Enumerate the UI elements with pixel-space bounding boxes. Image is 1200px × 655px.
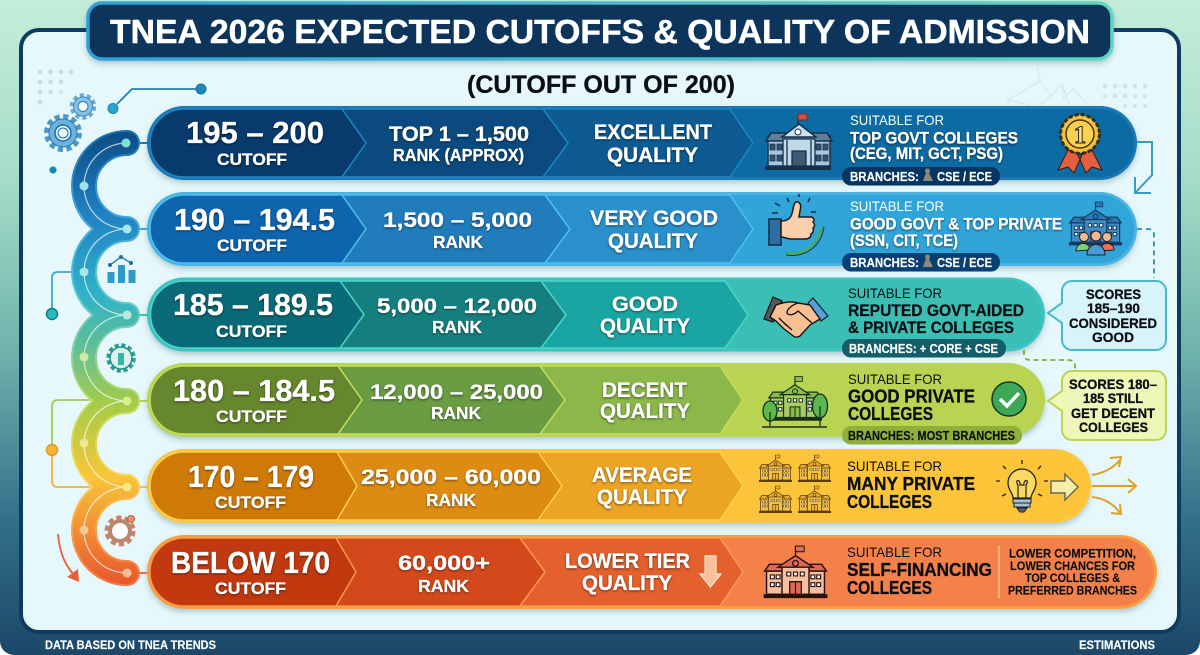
suitable for text: COLLEGES bbox=[847, 578, 932, 598]
branches pill: CSE / ECE bbox=[937, 256, 992, 270]
row 2 cutoff, rank and quality text: QUALITY bbox=[608, 229, 698, 253]
branches pill: BRANCHES: + CORE + CSE bbox=[849, 342, 998, 356]
callout: scores 180-185: COLLEGES bbox=[1079, 419, 1148, 435]
arrow: downward direction bbox=[58, 534, 79, 582]
branches pill: CSE / ECE bbox=[937, 170, 992, 184]
suitable for text: SUITABLE FOR bbox=[847, 458, 942, 474]
callout: scores 185-190: 185–190 bbox=[1087, 300, 1140, 316]
branches pill: BRANCHES: MOST BRANCHES bbox=[848, 429, 1015, 443]
callout: scores 180-185: GET DECENT bbox=[1071, 405, 1155, 421]
row 2: 190-194.5 bbox=[147, 192, 1137, 272]
icon: light bulb bbox=[996, 460, 1048, 512]
icon: connector node line bbox=[49, 84, 206, 174]
icon: gears bbox=[47, 96, 94, 149]
row 2 cutoff, rank and quality text: 190 – 194.5 bbox=[174, 203, 335, 237]
icon: gold medal: 1 bbox=[1074, 122, 1086, 149]
row 4 cutoff, rank and quality text: 180 – 184.5 bbox=[173, 374, 335, 408]
row 5 cutoff, rank and quality text: RANK bbox=[426, 490, 476, 510]
row 3 cutoff, rank and quality text bbox=[173, 288, 690, 341]
row 4 cutoff, rank and quality text: RANK bbox=[431, 403, 481, 423]
row 3 cutoff, rank and quality text: QUALITY bbox=[600, 314, 690, 338]
suitable for text: (SSN, CIT, TCE) bbox=[850, 231, 958, 250]
icon: school with students bbox=[1069, 202, 1122, 255]
row 3: 185-189.5 bbox=[147, 278, 1045, 358]
row 5 cutoff, rank and quality text bbox=[188, 460, 692, 512]
title banner: TNEA 2026 EXPECTED CUTOFFS & QUALITY OF ADMISSION bbox=[110, 14, 1090, 51]
suitable for text: SUITABLE FOR bbox=[850, 198, 944, 214]
row 6: below 170 bbox=[147, 535, 1157, 609]
suitable for text: & PRIVATE COLLEGES bbox=[848, 318, 1014, 337]
suitable for text: GOOD PRIVATE bbox=[848, 386, 975, 406]
branches pill bbox=[842, 167, 1000, 186]
row 4 cutoff, rank and quality text: QUALITY bbox=[600, 399, 690, 423]
suitable for text bbox=[850, 112, 1018, 163]
suitable for text: COLLEGES bbox=[847, 492, 932, 512]
row 2 cutoff, rank and quality text: RANK bbox=[433, 232, 483, 252]
row 6 cutoff, rank and quality text bbox=[171, 546, 690, 598]
callout: scores 180-185: 185 STILL bbox=[1083, 390, 1143, 406]
suitable for text bbox=[848, 371, 975, 424]
row 5 cutoff, rank and quality text: AVERAGE bbox=[592, 463, 692, 487]
lower competition note: PREFERRED BRANCHES bbox=[1008, 584, 1137, 598]
timeline snake bbox=[80, 138, 148, 578]
arrows: three outgoing options bbox=[1092, 457, 1136, 514]
row 2 cutoff, rank and quality text: CUTOFF bbox=[217, 236, 287, 255]
branches pill bbox=[842, 253, 1000, 272]
icon: gold medal bbox=[1058, 115, 1102, 173]
row 4 cutoff, rank and quality text bbox=[173, 374, 690, 426]
suitable for text bbox=[848, 285, 1024, 337]
row 6 cutoff, rank and quality text: 60,000+ bbox=[398, 551, 490, 575]
icon: bar chart bbox=[108, 255, 136, 283]
icon: green check bbox=[992, 382, 1026, 416]
decorative network and dots: top right bbox=[1008, 67, 1147, 108]
icon: teal gear bbox=[108, 346, 134, 370]
suitable for text: SUITABLE FOR bbox=[848, 285, 942, 301]
row 1 cutoff, rank and quality text bbox=[186, 116, 712, 169]
row 1 cutoff, rank and quality text: QUALITY bbox=[607, 143, 698, 167]
dashed connector: row 2 to callout bbox=[1137, 229, 1154, 278]
row 6 cutoff, rank and quality text: LOWER TIER bbox=[565, 549, 690, 573]
dashed connector: row 3 to callout bbox=[1024, 350, 1075, 370]
callout: scores 180-185: SCORES 180– bbox=[1069, 376, 1157, 392]
row 1: 195-200 bbox=[147, 106, 1137, 186]
row 6 cutoff, rank and quality text: BELOW 170 bbox=[171, 546, 330, 580]
footer left note: DATA BASED ON TNEA TRENDS bbox=[45, 638, 216, 652]
row 1 cutoff, rank and quality text: 195 – 200 bbox=[186, 116, 324, 150]
row 4 cutoff, rank and quality text: DECENT bbox=[602, 378, 687, 402]
callout: scores 185-190: SCORES bbox=[1086, 286, 1141, 302]
callout: scores 185-190: CONSIDERED bbox=[1069, 315, 1157, 331]
row 2 cutoff, rank and quality text: VERY GOOD bbox=[590, 206, 718, 230]
row 5 cutoff, rank and quality text: 25,000 – 60,000 bbox=[361, 465, 541, 489]
suitable for text: SUITABLE FOR bbox=[850, 112, 944, 128]
lower competition note: TOP COLLEGES & bbox=[1025, 571, 1120, 585]
callout: scores 180-185 bbox=[1048, 371, 1166, 440]
row 5: 170-179 bbox=[147, 449, 1091, 523]
suitable for text: SELF-FINANCING bbox=[847, 560, 992, 580]
icon: right arrow bbox=[1051, 474, 1078, 500]
suitable for text bbox=[847, 544, 992, 598]
suitable for text bbox=[847, 458, 975, 512]
icon: green school with trees bbox=[762, 377, 828, 427]
lower competition note: LOWER CHANCES FOR bbox=[1010, 559, 1135, 573]
row 4: 180-184.5 bbox=[147, 363, 1045, 444]
row 5 cutoff, rank and quality text: CUTOFF bbox=[215, 493, 286, 512]
suitable for text: SUITABLE FOR bbox=[847, 544, 942, 560]
left bracket connector bbox=[46, 400, 90, 487]
row 4 cutoff, rank and quality text: CUTOFF bbox=[216, 407, 287, 426]
row 5 cutoff, rank and quality text: QUALITY bbox=[597, 485, 687, 509]
suitable for text bbox=[850, 198, 1062, 250]
row 3 cutoff, rank and quality text: GOOD bbox=[612, 292, 678, 316]
row 3 cutoff, rank and quality text: 5,000 – 12,000 bbox=[377, 294, 537, 318]
left connector teal bbox=[46, 272, 71, 320]
row 3 cutoff, rank and quality text: CUTOFF bbox=[216, 322, 287, 341]
suitable for text: MANY PRIVATE bbox=[847, 474, 975, 494]
row 6 cutoff, rank and quality text: QUALITY bbox=[582, 571, 672, 595]
branches pill: BRANCHES: bbox=[850, 170, 919, 184]
row 3 cutoff, rank and quality text: 185 – 189.5 bbox=[173, 288, 333, 322]
suitable for text: GOOD GOVT & TOP PRIVATE bbox=[850, 214, 1062, 234]
row 2 cutoff, rank and quality text: 1,500 – 5,000 bbox=[383, 208, 532, 232]
footer right note: ESTIMATIONS bbox=[1079, 638, 1155, 652]
row 1 cutoff, rank and quality text: CUTOFF bbox=[217, 150, 287, 169]
icon: four colleges bbox=[759, 455, 831, 513]
branches pill bbox=[842, 426, 1022, 444]
branches pill bbox=[842, 339, 1006, 358]
subtitle: (CUTOFF OUT OF 200) bbox=[467, 71, 735, 99]
row 1 cutoff, rank and quality text: RANK (APPROX) bbox=[393, 145, 524, 165]
icon: down arrow bbox=[700, 556, 721, 587]
icon: handshake bbox=[764, 297, 828, 337]
icon: orange gear bbox=[107, 516, 134, 544]
lower competition note: LOWER COMPETITION, bbox=[1009, 546, 1136, 560]
row 6 cutoff, rank and quality text: CUTOFF bbox=[215, 579, 286, 598]
row 6 cutoff, rank and quality text: RANK bbox=[418, 576, 469, 596]
decorative dots: top left bbox=[38, 70, 73, 104]
icon: red school bbox=[764, 546, 827, 598]
row 1 cutoff, rank and quality text: TOP 1 – 1,500 bbox=[389, 122, 529, 146]
suitable for text: (CEG, MIT, GCT, PSG) bbox=[850, 144, 1003, 163]
row 1 cutoff, rank and quality text: EXCELLENT bbox=[594, 120, 712, 144]
row 5 cutoff, rank and quality text: 170 – 179 bbox=[188, 460, 314, 494]
suitable for text: REPUTED GOVT-AIDED bbox=[848, 301, 1024, 320]
icon: thumbs up bbox=[769, 194, 824, 255]
lower competition note bbox=[1008, 546, 1137, 598]
suitable for text: SUITABLE FOR bbox=[848, 371, 942, 387]
row 4 cutoff, rank and quality text: 12,000 – 25,000 bbox=[370, 380, 543, 404]
branches pill: BRANCHES: bbox=[850, 256, 919, 270]
title banner bbox=[88, 3, 1112, 59]
suitable for text: TOP GOVT COLLEGES bbox=[850, 128, 1018, 148]
arrow: row 1 to row 2 bbox=[1135, 142, 1152, 193]
callout: scores 185-190: GOOD bbox=[1092, 329, 1134, 345]
callout: scores 185-190 bbox=[1048, 281, 1166, 350]
icon: government building bbox=[765, 114, 832, 170]
suitable for text: COLLEGES bbox=[848, 404, 933, 424]
row 3 cutoff, rank and quality text: RANK bbox=[432, 317, 482, 337]
row 2 cutoff, rank and quality text bbox=[174, 203, 718, 255]
